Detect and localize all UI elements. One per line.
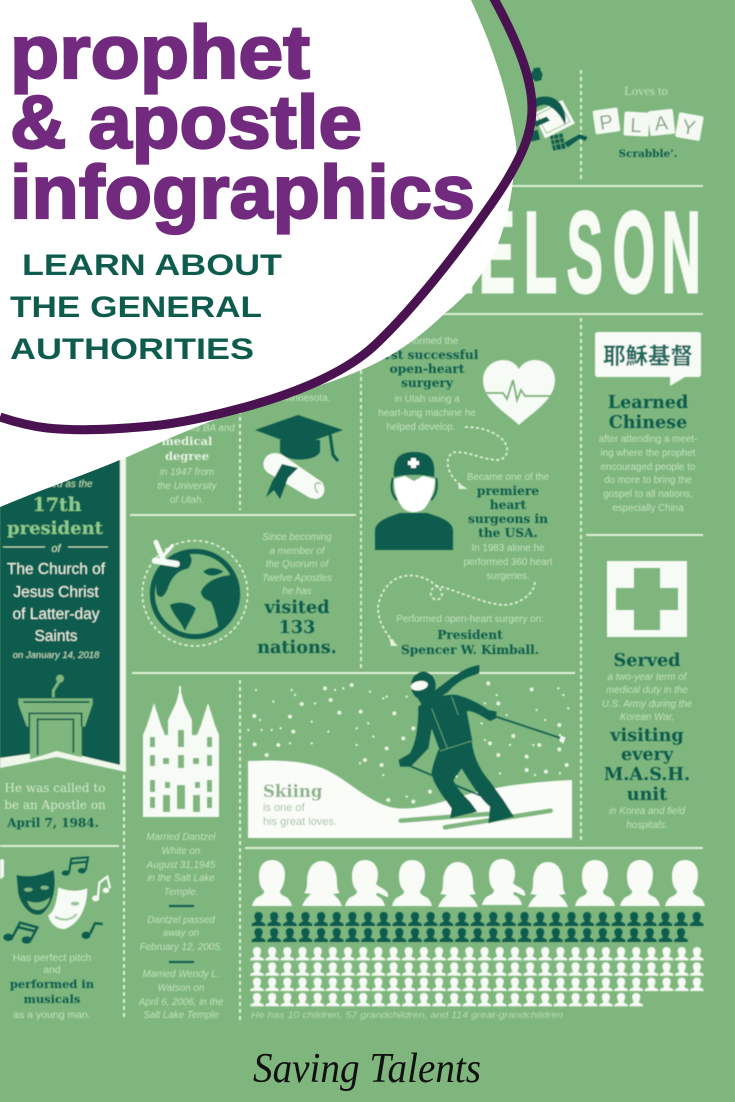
icon: play tiles: P bbox=[598, 111, 614, 135]
block: open-heart surgery: heart-lung machine he bbox=[378, 408, 476, 419]
block: learned chinese: after attending a meet- bbox=[599, 434, 697, 445]
block: musicals: as a young man. bbox=[13, 1009, 91, 1021]
icon: heart bbox=[483, 360, 555, 425]
block: served: a two-year term of bbox=[608, 672, 688, 683]
block: medical degree: University of Minnesota. bbox=[226, 393, 330, 404]
block: served: U.S. Army during the bbox=[602, 699, 693, 710]
block: open-heart surgery bbox=[376, 336, 479, 433]
icon: pulpit bbox=[18, 675, 93, 759]
block: visited 133 nations: a member of bbox=[270, 546, 326, 557]
icon: play tiles: Y bbox=[680, 116, 697, 140]
subtitle: THE GENERAL bbox=[10, 291, 262, 324]
block: open-heart surgery: open-heart bbox=[390, 362, 465, 376]
block: marriage dates bbox=[138, 832, 224, 1021]
block: kimball: Spencer W. Kimball. bbox=[401, 643, 539, 657]
block: medical degree: the University bbox=[157, 481, 218, 492]
icon: speech bubble chinese: 耶穌基督 bbox=[603, 344, 693, 369]
block: marriage dates: Married Wendy L. bbox=[142, 969, 220, 980]
heading: nelson: NELSON bbox=[436, 190, 701, 318]
icon grid: great-grandchildren bbox=[250, 947, 705, 1008]
brand: saving talents: Saving Talents bbox=[253, 1046, 481, 1092]
panel: skiing scene: is one of bbox=[263, 802, 306, 814]
block: served: unit bbox=[627, 784, 668, 805]
block: kimball: President bbox=[437, 628, 503, 642]
block: visited 133 nations bbox=[257, 532, 337, 658]
block: visited 133 nations: the Quorum of bbox=[266, 559, 330, 570]
block: marriage dates: Temple. bbox=[164, 887, 198, 898]
text: scrabble: Scrabble’. bbox=[619, 148, 677, 160]
panel: president banner: Ordained as the bbox=[21, 479, 93, 490]
subtitle bbox=[10, 249, 282, 366]
block: medical degree: degree bbox=[165, 449, 209, 463]
block: served: Korean War, bbox=[620, 712, 674, 723]
icon: play tiles: L bbox=[630, 115, 642, 137]
block: marriage dates: White on bbox=[162, 846, 200, 857]
block: marriage dates: Married Dantzel bbox=[146, 832, 216, 843]
icon: speech bubble chinese bbox=[595, 332, 701, 386]
block: musicals: Has perfect pitch bbox=[13, 952, 92, 964]
block: musicals bbox=[10, 952, 95, 1021]
panel: president banner: president bbox=[7, 518, 104, 539]
block: learned chinese: encouraged people to bbox=[601, 462, 696, 473]
ring stroke bbox=[0, 0, 532, 430]
block: premiere surgeons: surgeons in bbox=[468, 512, 548, 526]
block: served: in Korea and field bbox=[609, 806, 686, 817]
title bbox=[10, 10, 475, 234]
block: called to be an apostle: be an Apostle on bbox=[4, 798, 106, 812]
block: called to be an apostle bbox=[4, 781, 106, 830]
block: served: hospitals. bbox=[626, 820, 668, 831]
block: premiere surgeons: performed 360 heart bbox=[464, 557, 553, 568]
family silhouettes: children bbox=[252, 859, 705, 907]
block: served: M.A.S.H. bbox=[604, 764, 690, 785]
figure: skier bbox=[399, 665, 566, 827]
block: open-heart surgery: surgery bbox=[401, 376, 454, 390]
icon: play tiles: A bbox=[653, 112, 670, 136]
icon: play tiles bbox=[592, 107, 704, 141]
arrow: dashed path to premiere surgeons bbox=[448, 427, 507, 489]
text: loves to: Loves to bbox=[624, 84, 668, 98]
panel: president banner bbox=[0, 430, 126, 772]
block: open-heart surgery: in Utah using a bbox=[394, 394, 460, 405]
block: marriage dates: August 31,1945 bbox=[146, 860, 216, 871]
block: visited 133 nations: nations. bbox=[257, 637, 337, 658]
icon: scrabble player bbox=[528, 67, 588, 151]
block: marriage dates: away on bbox=[163, 928, 199, 939]
title: prophet bbox=[10, 10, 310, 94]
block: learned chinese: gospel to all nations, bbox=[603, 489, 693, 500]
block: medical degree: of Utah. bbox=[170, 495, 204, 506]
block: marriage dates: Salt Lake Temple bbox=[143, 1010, 219, 1021]
block: marriage dates: Watson on bbox=[158, 983, 204, 994]
block: musicals: performed in bbox=[10, 977, 95, 991]
block: kimball: Performed open-heart surgery on: bbox=[396, 614, 544, 625]
block: kimball bbox=[396, 614, 544, 657]
block: premiere surgeons bbox=[464, 472, 553, 582]
icon: medical cross bbox=[607, 561, 687, 637]
icon grid: grandchildren bbox=[251, 912, 705, 944]
panel: skiing scene bbox=[248, 665, 572, 838]
block: premiere surgeons: heart bbox=[490, 498, 527, 512]
block: medical degree bbox=[139, 393, 330, 506]
title: infographics bbox=[10, 150, 475, 234]
title blob bbox=[0, 0, 517, 507]
block: open-heart surgery: helped develop. bbox=[386, 422, 456, 433]
panel: president banner: Jesus Christ bbox=[13, 584, 99, 601]
block: musicals: musicals bbox=[24, 992, 80, 1006]
block: marriage dates: April 6, 2006, in the bbox=[138, 997, 224, 1008]
arrow: dashed path to kimball bbox=[378, 575, 535, 646]
block: premiere surgeons: Became one of the bbox=[467, 472, 550, 483]
block: premiere surgeons: the USA. bbox=[478, 526, 538, 540]
block: called to be an apostle: April 7, 1984. bbox=[6, 816, 99, 830]
block: premiere surgeons: surgeries. bbox=[486, 571, 530, 582]
icon: surgeon bbox=[375, 452, 453, 550]
block: open-heart surgery: first successful bbox=[376, 348, 479, 362]
block: learned chinese: especially China bbox=[612, 503, 684, 514]
block: called to be an apostle: He was called to bbox=[5, 781, 105, 795]
block: served bbox=[602, 650, 693, 831]
icon: graduation cap and diploma bbox=[255, 415, 343, 499]
panel: president banner: 17th bbox=[32, 494, 82, 516]
block: musicals: and bbox=[43, 964, 61, 976]
block: premiere surgeons: premiere bbox=[477, 484, 539, 498]
block: marriage dates: Dantzel passed bbox=[147, 915, 215, 926]
block: medical degree: medical bbox=[162, 434, 213, 448]
block: marriage dates: in the Salt Lake bbox=[147, 873, 215, 884]
block: marriage dates: February 12, 2005. bbox=[140, 942, 222, 953]
block: learned chinese: ing where the prophet bbox=[601, 448, 696, 459]
panel: president banner: The Church of bbox=[7, 561, 106, 578]
caption: family: He has 10 children, 57 grandchildren, and 114 great-grandchildren bbox=[251, 1010, 563, 1021]
block: visited 133 nations: 133 bbox=[279, 617, 315, 638]
icon: temple bbox=[143, 686, 219, 817]
panel: president banner: of Latter-day bbox=[12, 606, 100, 623]
block: medical degree: He earned his BA and bbox=[139, 423, 235, 434]
icon: theatre masks and notes bbox=[0, 857, 110, 944]
subtitle: AUTHORITIES bbox=[10, 333, 254, 366]
block: visited 133 nations: he has bbox=[282, 586, 312, 597]
block: open-heart surgery: Performed the bbox=[396, 336, 459, 347]
block: served: every bbox=[621, 744, 674, 765]
block: premiere surgeons: In 1983 alone he bbox=[472, 543, 545, 554]
subtitle: LEARN ABOUT bbox=[22, 249, 282, 282]
panel: president banner: of bbox=[51, 543, 62, 555]
text: skiing: Skiing bbox=[263, 782, 323, 801]
block: visited 133 nations: Since becoming bbox=[262, 532, 332, 543]
block: learned chinese: do more to bring the bbox=[604, 475, 692, 486]
snow ground bbox=[248, 761, 572, 838]
block: learned chinese bbox=[599, 392, 697, 514]
block: visited 133 nations: visited bbox=[263, 597, 330, 618]
block: medical degree: in 1947 from bbox=[160, 467, 214, 478]
block: learned chinese: Learned bbox=[608, 392, 688, 413]
panel: skiing scene: his great loves. bbox=[263, 816, 337, 828]
block: served: visiting bbox=[609, 725, 684, 746]
block: served: medical duty in the bbox=[606, 685, 688, 696]
icon: globe and plane bbox=[142, 541, 248, 646]
snowflakes bbox=[248, 683, 568, 802]
panel: president banner: on January 14, 2018 bbox=[13, 650, 100, 661]
block: learned chinese: Chinese bbox=[609, 412, 687, 433]
panel: president banner: Saints bbox=[34, 628, 78, 645]
title: & apostle bbox=[10, 80, 362, 164]
block: served: Served bbox=[614, 650, 680, 671]
block: visited 133 nations: Twelve Apostles bbox=[262, 573, 332, 584]
